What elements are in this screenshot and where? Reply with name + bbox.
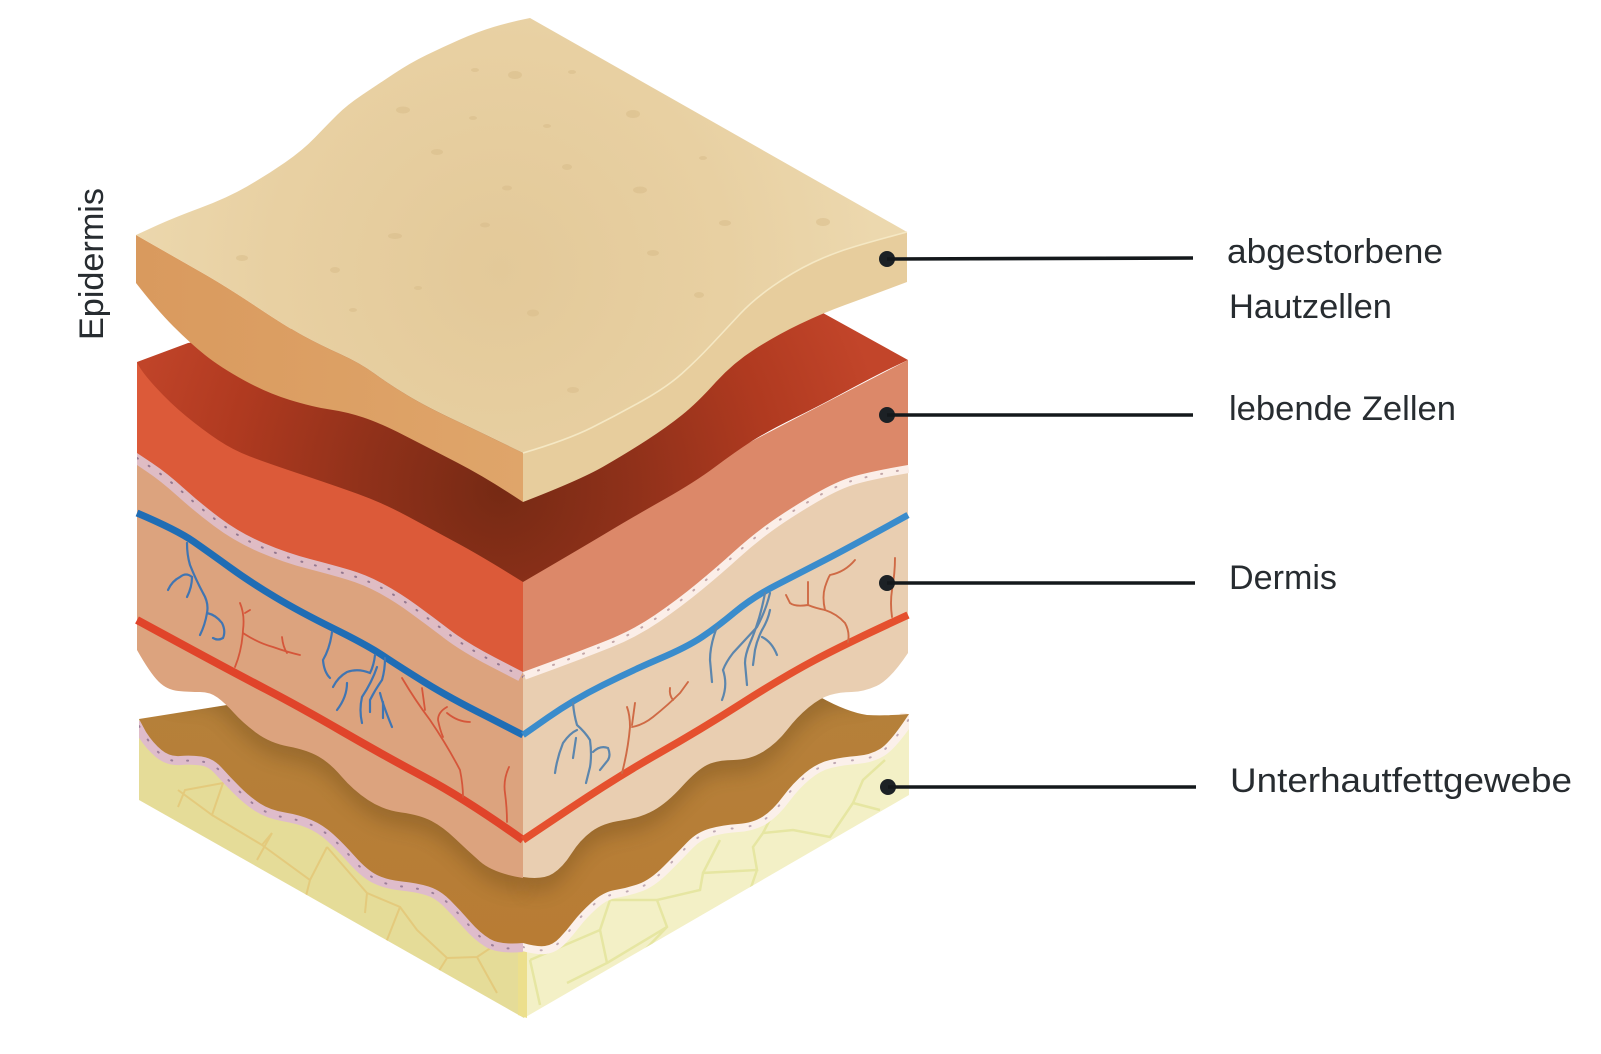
callout: Dermis: Dermis [1229,559,1337,597]
skin block illustration [136,18,909,1018]
callout: lebende Zellen [879,390,1456,428]
small veins left [168,543,392,727]
layer: living cells [137,300,908,672]
dermis left face [137,450,523,878]
blood vessels: red artery [137,615,908,840]
dermis right face [523,460,908,878]
label: Epidermis (vertical): Epidermis [73,188,111,340]
living cells left face [137,362,523,672]
dead cells left face [136,235,523,502]
small veins right [555,593,777,783]
layer: brown fat top surface [139,698,909,946]
membrane above fat [139,715,909,950]
callout: Unterhautfettgewebe: Unterhautfettgewebe [1230,762,1572,800]
callout: abgestorbene Hautzellen: abgestorbene [1227,233,1443,271]
dead cells top surface [136,18,907,453]
callout: lebende Zellen: lebende Zellen [1229,390,1456,428]
pores on skin surface [236,68,830,393]
callout: Dermis [879,559,1337,597]
small arteries right [622,558,895,773]
highlight on front edge [523,232,907,453]
living cells top surface [137,300,908,582]
membrane below living cells [137,453,908,677]
layer: dermis [137,450,908,878]
layer: dead skin cells [136,18,907,502]
layer: subcutaneous fat [139,715,909,1018]
callout: Unterhautfettgewebe [880,762,1572,800]
blood vessels: blue vein [137,513,908,735]
small arteries left [235,603,509,822]
living cells right face [523,360,908,672]
callout: abgestorbene Hautzellen: Hautzellen [1229,288,1392,326]
dead cells right face [523,232,907,502]
callout: abgestorbene Hautzellen [879,233,1443,326]
